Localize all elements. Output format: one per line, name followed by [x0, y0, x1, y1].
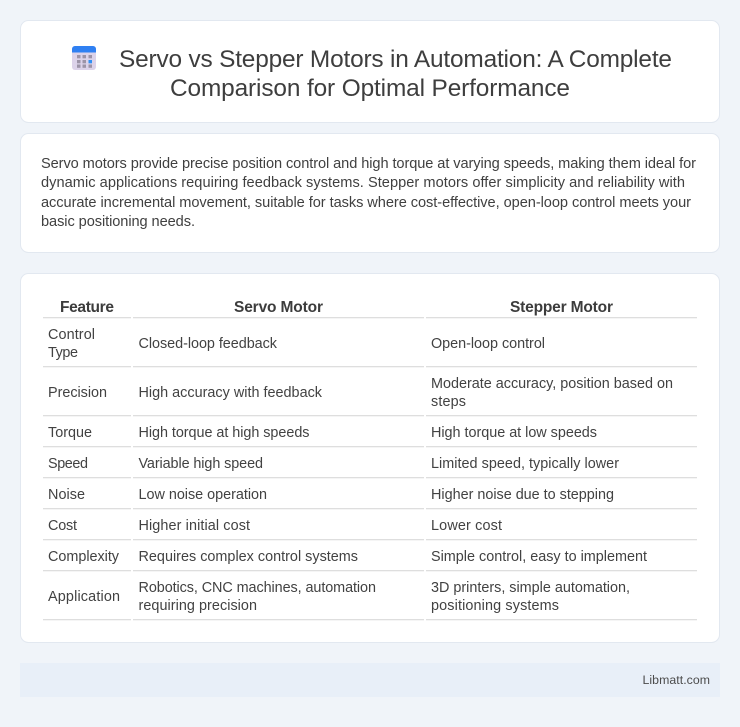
text block: summary: accurate incremental movement, suitable for tasks where cost-effective, open-loop control meets your — [41, 195, 691, 211]
table row: control type: Type — [48, 345, 78, 361]
table row: speed: Limited speed, typically lower — [431, 456, 619, 472]
table row: precision: Moderate accuracy, position based on — [431, 376, 673, 392]
icon: calendar — [72, 46, 96, 70]
table row: complexity — [43, 549, 697, 571]
table row: speed: Variable high speed — [138, 456, 263, 472]
table header row: Stepper Motor — [510, 299, 613, 316]
table header row — [43, 299, 697, 318]
table row: torque — [43, 425, 697, 447]
text block: summary: dynamic applications requiring feedback systems. Stepper motors offer simplicity and reliability with — [41, 175, 685, 191]
table row: precision: Precision — [48, 385, 107, 401]
table row: precision: High accuracy with feedback — [138, 385, 323, 401]
table row: noise: Noise — [48, 487, 85, 503]
title — [119, 46, 672, 102]
table row: noise — [43, 487, 697, 509]
panel: title header — [20, 20, 720, 122]
footer credit: Libmatt.com — [642, 673, 710, 687]
table row: application: Application — [48, 589, 120, 605]
title: Comparison for Optimal Performance — [170, 75, 570, 102]
table row: precision — [43, 376, 697, 416]
table row: control type: Open-loop control — [431, 336, 545, 352]
table row: speed: Speed — [48, 456, 88, 472]
table row: cost: Higher initial cost — [138, 518, 250, 534]
table row: precision: steps — [431, 394, 466, 410]
table header row: Servo Motor — [234, 299, 323, 316]
table row: speed — [43, 456, 697, 478]
table row: control type — [43, 327, 697, 367]
panel: introduction — [20, 134, 720, 252]
table row: torque: Torque — [48, 425, 92, 441]
table row: noise: Higher noise due to stepping — [431, 487, 614, 503]
table row: complexity: Requires complex control systems — [138, 549, 358, 565]
text block: summary — [41, 156, 696, 230]
table row: control type: Closed-loop feedback — [138, 336, 278, 352]
table row: torque: High torque at high speeds — [138, 425, 310, 441]
title: Servo vs Stepper Motors in Automation: A Complete — [119, 46, 672, 73]
table row: cost: Lower cost — [431, 518, 502, 534]
table row: control type: Control — [48, 327, 95, 343]
table row: cost: Cost — [48, 518, 77, 534]
table row: application: requiring precision — [138, 598, 257, 614]
table row: cost — [43, 518, 697, 540]
text block: summary: basic positioning needs. — [41, 214, 195, 230]
table row: application — [43, 580, 697, 620]
table row: complexity: Complexity — [48, 549, 120, 565]
footer — [20, 663, 720, 697]
text block: summary: Servo motors provide precise position control and high torque at varying speeds, making them ideal for — [41, 156, 696, 172]
table header row: Feature — [60, 299, 114, 316]
panel: comparison table — [20, 274, 720, 642]
table row: complexity: Simple control, easy to implement — [431, 549, 647, 565]
table row: noise: Low noise operation — [138, 487, 267, 503]
table row: torque: High torque at low speeds — [431, 425, 597, 441]
table row: application: positioning systems — [431, 598, 559, 614]
table row: application: Robotics, CNC machines, automation — [138, 580, 376, 596]
table row: application: 3D printers, simple automation, — [431, 580, 630, 596]
